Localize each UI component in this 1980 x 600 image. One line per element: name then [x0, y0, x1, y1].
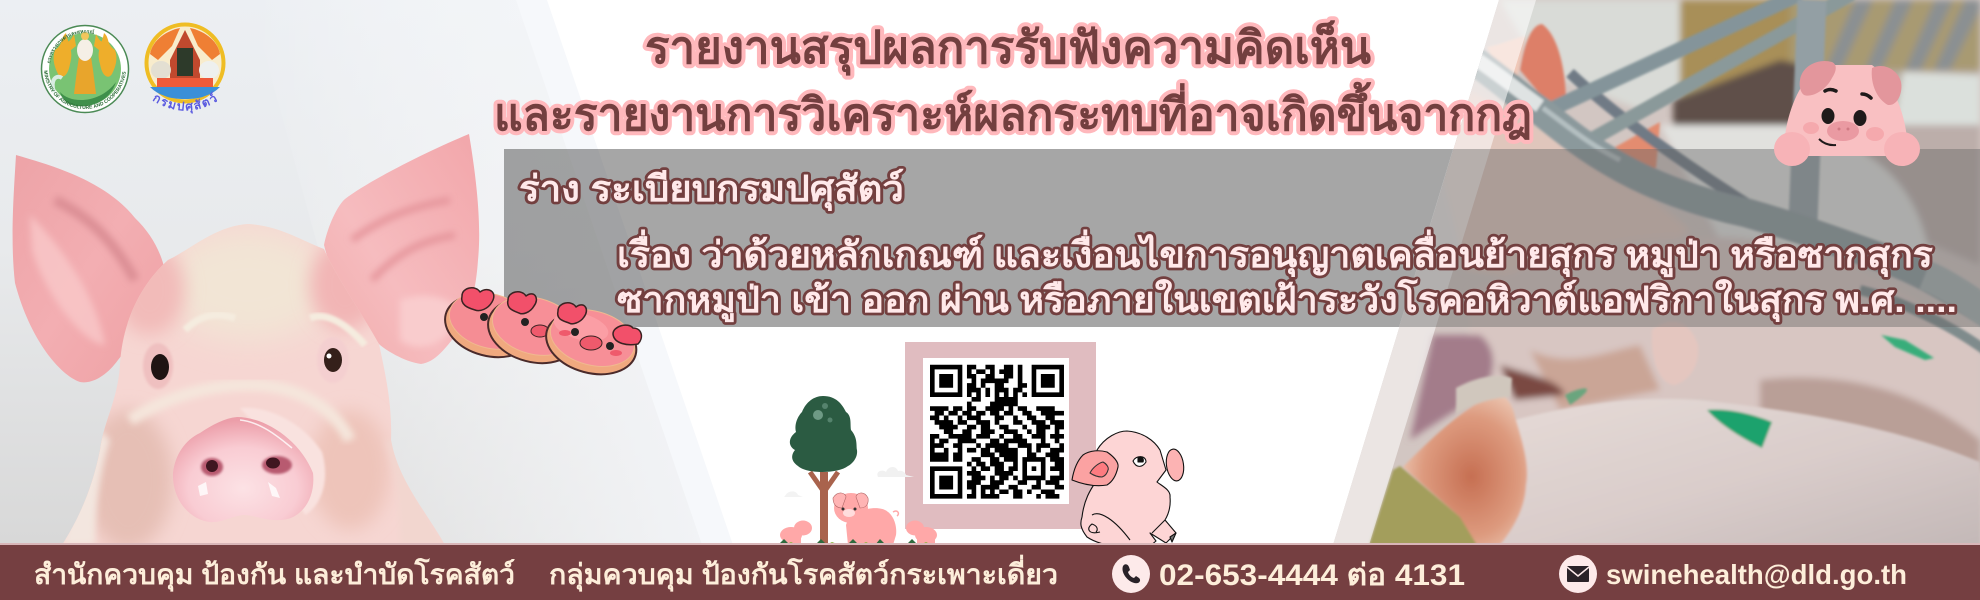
- icon: tree and pig family: [778, 396, 937, 545]
- icon: department of livestock logo: กรมปศุสัตว์: [152, 91, 217, 114]
- icon: ministry logo: [40, 24, 130, 114]
- main title: และรายงานการวิเคราะห์ผลกระทบที่อาจเกิดขึ้นจากกฎ: [494, 81, 1532, 140]
- icon: pig cookies: [438, 283, 644, 384]
- icon: ministry logo: กระทรวงเกษตรและสหกรณ์: [48, 30, 94, 64]
- footer band: [0, 543, 1980, 600]
- icon: phone: [1112, 555, 1150, 593]
- icon: cartoon pig top right: [1774, 61, 1920, 166]
- draft regulation heading and subject: ร่าง ระเบียบกรมปศุสัตว์: [519, 168, 904, 212]
- footer office names: สำนักควบคุม ป้องกัน และบำบัดโรคสัตว์: [34, 557, 515, 592]
- draft regulation heading and subject: [519, 168, 1957, 323]
- footer office names: [34, 554, 1058, 592]
- main title: [494, 20, 1532, 140]
- QR code: [930, 367, 1064, 496]
- photo: pigs in a farrowing pen: [1330, 0, 1980, 545]
- footer office names: กลุ่มควบคุม ป้องกันโรคสัตว์กระเพาะเดี่ยว: [549, 554, 1058, 592]
- email address: swinehealth@dld.go.th: [1606, 559, 1907, 590]
- grey text band: [504, 149, 1980, 327]
- icon: department of livestock logo: [144, 22, 226, 114]
- phone number: 02-653-4444 ต่อ 4131: [1159, 559, 1465, 592]
- left background panel: [0, 0, 733, 545]
- QR panel: [905, 342, 1096, 529]
- icon: email: [1559, 555, 1597, 593]
- icon: sitting cartoon pig: [1072, 431, 1186, 547]
- main title: รายงานสรุปผลการรับฟังความคิดเห็น: [645, 20, 1371, 76]
- pig portrait photo: [13, 134, 479, 550]
- draft regulation heading and subject: เรื่อง ว่าด้วยหลักเกณฑ์ และเงื่อนไขการอนุญาตเคลื่อนย้ายสุกร หมูป่า หรือซากสุกร: [617, 229, 1934, 278]
- icon: ministry logo: MINISTRY OF AGRICULTURE AND COOPERATIVES: [44, 70, 126, 109]
- draft regulation heading and subject: ซากหมูป่า เข้า ออก ผ่าน หรือภายในเขตเฝ้าระวังโรคอหิวาต์แอฟริกาในสุกร พ.ศ. ....: [617, 278, 1957, 323]
